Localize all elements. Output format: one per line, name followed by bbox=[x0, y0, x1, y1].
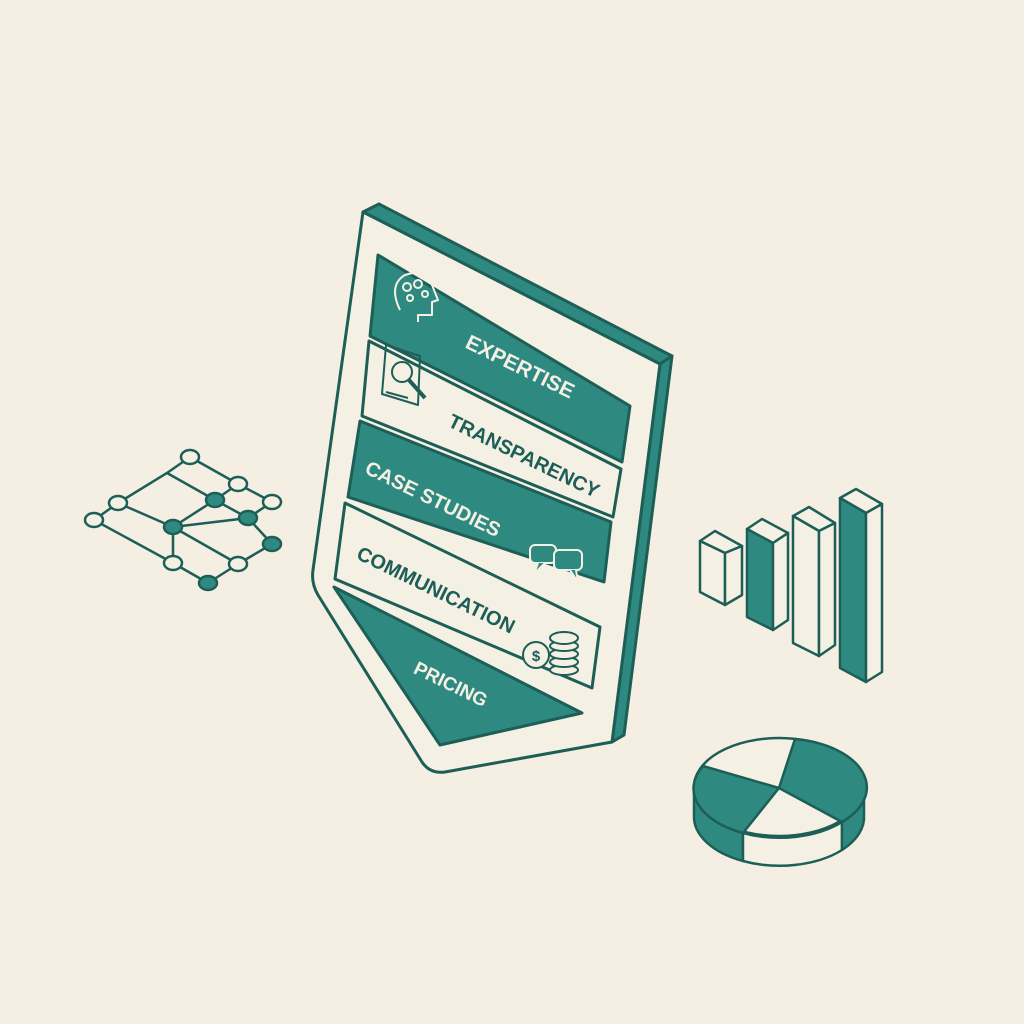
icon: coins: $ bbox=[532, 648, 541, 665]
icon: document magnifier bbox=[382, 345, 425, 405]
band: communication bbox=[335, 503, 600, 688]
shield front face bbox=[313, 212, 660, 772]
bar chart bbox=[700, 489, 882, 682]
shield side faces bbox=[363, 204, 672, 742]
network diagram bbox=[85, 450, 281, 590]
icon: chat bubbles bbox=[530, 545, 582, 582]
band: communication: COMMUNICATION bbox=[353, 543, 518, 638]
band: expertise: EXPERTISE bbox=[462, 331, 578, 403]
pie chart bbox=[694, 738, 867, 866]
icon: coins bbox=[523, 632, 578, 675]
band: pricing: PRICING bbox=[410, 658, 491, 712]
band: case studies: CASE STUDIES bbox=[361, 457, 504, 542]
band: pricing bbox=[334, 587, 582, 745]
band: transparency: TRANSPARENCY bbox=[445, 411, 603, 503]
shield bbox=[313, 204, 672, 772]
band: transparency bbox=[362, 341, 621, 517]
band: case studies bbox=[348, 421, 611, 582]
band: expertise bbox=[370, 255, 630, 462]
icon: head with brain bbox=[395, 273, 438, 322]
